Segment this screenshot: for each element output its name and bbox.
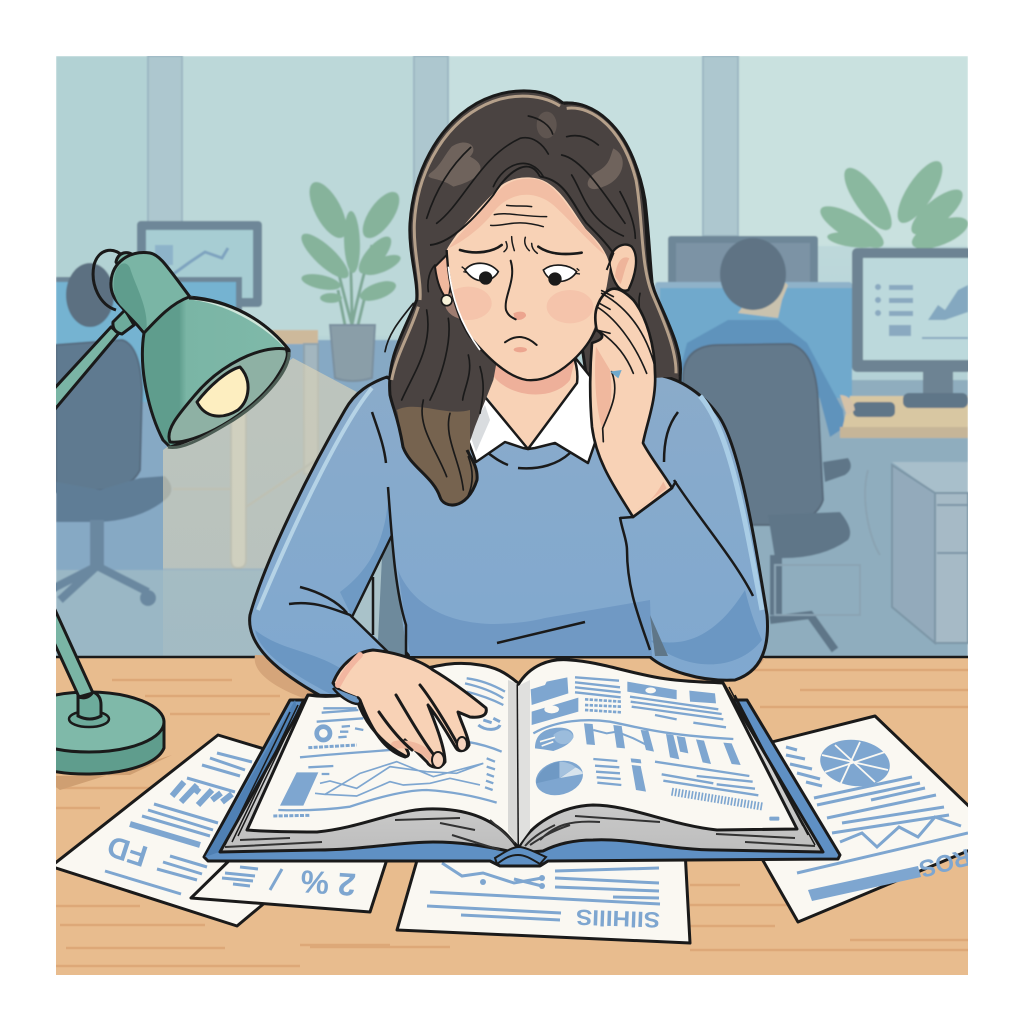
lamp light beam <box>163 358 357 656</box>
neck and collar <box>465 355 596 463</box>
paper: centre <box>397 850 690 943</box>
paper: far left <box>56 734 264 928</box>
background office <box>50 56 973 666</box>
paper label: ROS <box>916 843 973 882</box>
left page block <box>220 695 518 853</box>
eyebrows and forehead wrinkles <box>460 245 582 254</box>
right background desk, monitor and cabinet <box>840 248 973 643</box>
right background coworker <box>655 236 860 650</box>
paper label: SIlHIlIS <box>576 905 660 932</box>
back hair, right side <box>560 103 680 400</box>
paper label: FD <box>103 829 152 872</box>
open book <box>204 660 840 866</box>
book cover <box>204 700 840 866</box>
side of face and ear <box>435 255 452 300</box>
left page <box>247 663 518 847</box>
page edge lines <box>225 816 815 850</box>
paper label: 2 % <box>299 863 357 903</box>
sleeve cuff over wrist <box>333 688 360 704</box>
face <box>430 167 613 380</box>
paper: far right with pie chart <box>757 716 975 922</box>
plant: centre <box>300 182 402 382</box>
cuff line <box>620 481 676 518</box>
spine <box>495 847 546 864</box>
left page content <box>273 678 505 816</box>
head: zoom-space group <box>385 91 681 517</box>
lamp base and lower arm <box>56 608 170 790</box>
nose and mouth <box>505 261 537 352</box>
eyes <box>462 263 580 286</box>
sweater <box>250 375 768 702</box>
lamp opening and bulb <box>168 348 289 448</box>
paper: percent sheet <box>189 862 388 914</box>
hand on book <box>333 650 486 768</box>
right page content <box>531 677 779 821</box>
right page block <box>518 683 823 853</box>
lamp head and upper arm <box>40 250 289 448</box>
lower lock tint <box>397 407 477 505</box>
earring <box>441 295 452 306</box>
illustration: worried woman at a desk <box>56 56 968 975</box>
right page <box>518 660 797 847</box>
gap between arm and torso <box>354 558 404 639</box>
left background desk and monitors <box>50 221 318 606</box>
hand on cheek <box>590 289 672 517</box>
hair strands <box>385 116 650 495</box>
desk <box>56 655 968 975</box>
hair <box>390 91 681 505</box>
plant: right <box>820 160 968 249</box>
